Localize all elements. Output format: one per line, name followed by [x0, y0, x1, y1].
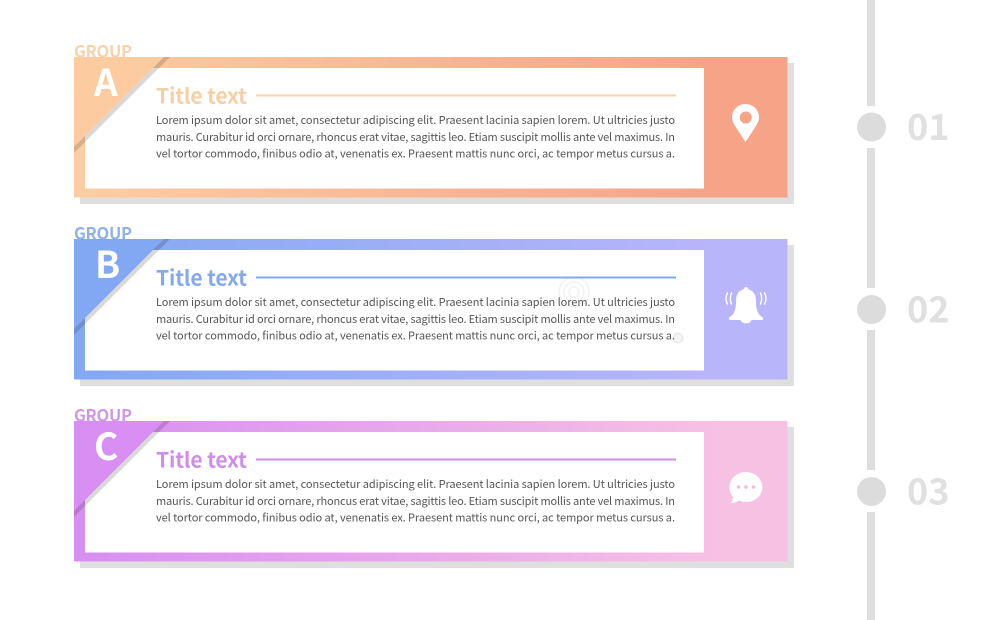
- step 03: 03: [907, 464, 949, 516]
- card shadow A: [80, 63, 794, 204]
- step 01: [857, 99, 949, 151]
- step 03: [857, 464, 949, 516]
- icon: speech bubble: [730, 472, 762, 503]
- corner letter B: B: [95, 235, 120, 289]
- panel: group B: [74, 220, 794, 386]
- step 02: [857, 282, 949, 334]
- group label A: GROUP: [74, 38, 132, 62]
- timeline: [857, 0, 949, 620]
- title rule A: [256, 94, 676, 96]
- card shadow B: [80, 245, 794, 386]
- watermark mark: [559, 277, 683, 343]
- body text C: mauris. Curabitur id orci ornare, rhoncus erat vitae, sagittis leo. Etiam suscipit mollis ante vel maximus. In: [156, 493, 675, 509]
- icon: map pin: [732, 104, 759, 142]
- corner triangle A: [74, 57, 164, 147]
- title B: Title text: [156, 262, 247, 292]
- title rule C: [256, 458, 676, 460]
- corner fold shadow C: [74, 421, 170, 517]
- corner fold shadow B: [74, 239, 170, 335]
- white content area B: [85, 250, 704, 370]
- step 01: 01: [907, 99, 949, 151]
- body text B: [156, 294, 675, 344]
- corner fold shadow A: [74, 57, 170, 153]
- body text A: [156, 112, 675, 162]
- white content area A: [85, 68, 704, 188]
- corner triangle C: [74, 421, 164, 511]
- body text A: Lorem ipsum dolor sit amet, consectetur adipiscing elit. Praesent lacinia sapien lorem. Ut ultricies justo: [156, 112, 675, 128]
- group label B: GROUP: [74, 220, 132, 244]
- body text B: mauris. Curabitur id orci ornare, rhoncus erat vitae, sagittis leo. Etiam suscipit mollis ante vel maximus. In: [156, 311, 675, 327]
- body text C: Lorem ipsum dolor sit amet, consectetur adipiscing elit. Praesent lacinia sapien lorem. Ut ultricies justo: [156, 476, 675, 492]
- title A: Title text: [156, 80, 247, 110]
- card frame B: [74, 239, 788, 380]
- title rule B: [256, 276, 676, 278]
- white content area C: [85, 432, 704, 552]
- body text C: vel tortor commodo, finibus odio at, venenatis ex. Praesent mattis nunc orci, ac tempor metus cursus a.: [156, 510, 675, 526]
- step 02: 02: [907, 282, 949, 334]
- card shadow C: [80, 427, 794, 568]
- card frame C: [74, 421, 788, 562]
- body text A: vel tortor commodo, finibus odio at, venenatis ex. Praesent mattis nunc orci, ac tempor metus cursus a.: [156, 146, 675, 162]
- body text B: vel tortor commodo, finibus odio at, venenatis ex. Praesent mattis nunc orci, ac tempor metus cursus a.: [156, 328, 675, 344]
- body text A: mauris. Curabitur id orci ornare, rhoncus erat vitae, sagittis leo. Etiam suscipit mollis ante vel maximus. In: [156, 129, 675, 145]
- panel: group C: [74, 402, 794, 568]
- icon: bell: [726, 287, 766, 323]
- body text B: Lorem ipsum dolor sit amet, consectetur adipiscing elit. Praesent lacinia sapien lorem. Ut ultricies justo: [156, 294, 675, 310]
- group label C: GROUP: [74, 402, 132, 426]
- body text C: [156, 476, 675, 526]
- title C: Title text: [156, 444, 247, 474]
- corner triangle B: [74, 239, 164, 329]
- corner letter A: A: [93, 53, 118, 107]
- panel: group A: [74, 38, 794, 204]
- corner letter C: C: [94, 417, 118, 471]
- card frame A: [74, 57, 788, 198]
